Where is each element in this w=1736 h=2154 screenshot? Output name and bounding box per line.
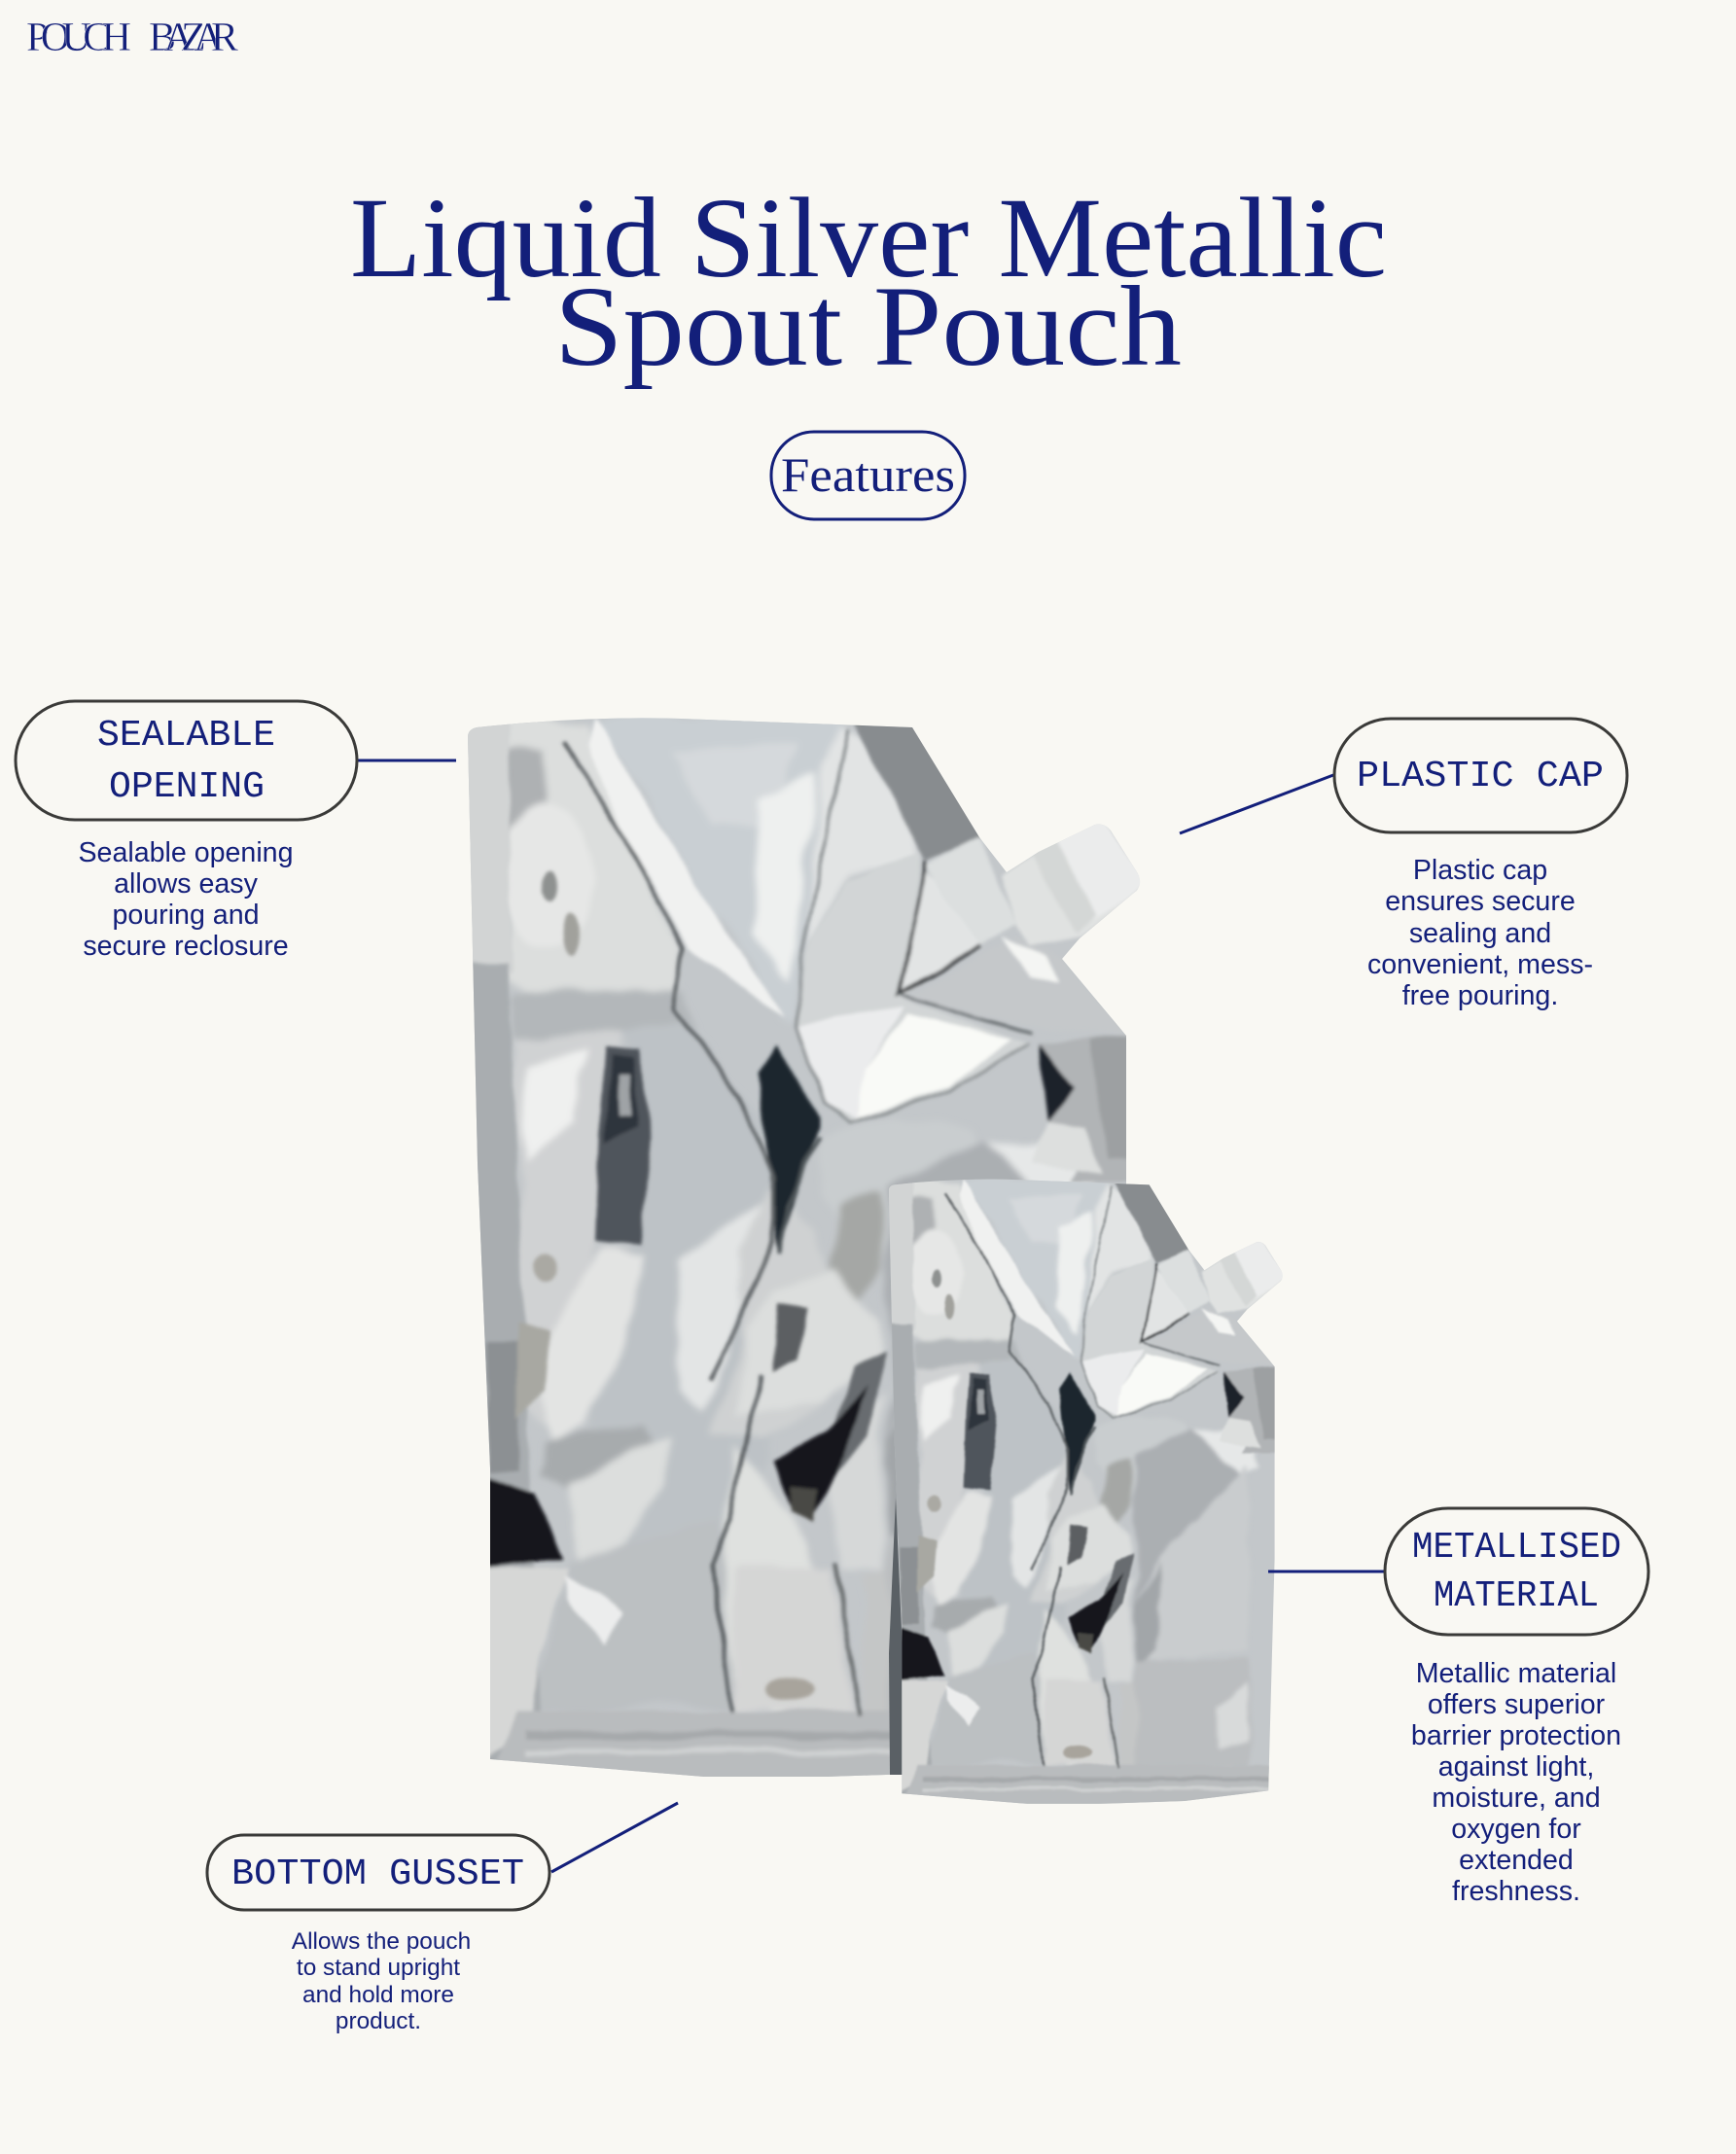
callout: metallised material: [1268, 1508, 1648, 1907]
callout: plastic cap: sealing and: [1409, 918, 1551, 949]
callout: sealable opening: allows easy: [114, 868, 259, 900]
callout: bottom gusset: to stand upright: [297, 1955, 460, 1981]
callout: bottom gusset: [207, 1803, 678, 2034]
callout: plastic cap: free pouring.: [1402, 980, 1558, 1011]
callout: bottom gusset: BOTTOM GUSSET: [231, 1854, 524, 1895]
logo: Pouch Bazar: POUCH: [26, 16, 131, 60]
callout: sealable opening: [16, 701, 456, 962]
title: [350, 174, 1387, 390]
callout: metallised material: freshness.: [1452, 1876, 1580, 1907]
callout: sealable opening: OPENING: [109, 766, 265, 808]
callout: bottom gusset: Allows the pouch: [292, 1928, 471, 1955]
small silver spout pouch: [882, 1175, 1287, 1812]
large silver spout pouch: [457, 710, 1148, 1789]
callout: sealable opening: secure reclosure: [83, 931, 289, 962]
features badge: [771, 432, 965, 519]
callout: metallised material: oxygen for: [1451, 1814, 1581, 1845]
callout: bottom gusset: product.: [336, 2008, 421, 2034]
shadow edge between the two pouches: [889, 1498, 906, 1775]
callout: bottom gusset: and hold more: [302, 1982, 454, 2008]
callout: sealable opening: Sealable opening: [78, 837, 294, 868]
callout: plastic cap: Plastic cap: [1413, 855, 1547, 886]
title: Spout Pouch: [554, 263, 1182, 390]
logo: Pouch Bazar: BAZAR: [149, 16, 238, 60]
features badge: Features: [781, 447, 955, 502]
callout: plastic cap: ensures secure: [1385, 886, 1576, 917]
callout: sealable opening: pouring and: [112, 900, 260, 931]
callout: metallised material: MATERIAL: [1434, 1575, 1599, 1617]
title: Liquid Silver Metallic: [350, 174, 1387, 301]
callout: metallised material: barrier protection: [1411, 1720, 1621, 1751]
callout: metallised material: extended: [1459, 1845, 1574, 1876]
callout: metallised material: Metallic material: [1416, 1658, 1616, 1689]
callout: metallised material: METALLISED: [1412, 1527, 1621, 1569]
callout: metallised material: offers superior: [1428, 1689, 1606, 1720]
callout: metallised material: moisture, and: [1432, 1783, 1601, 1814]
callout: plastic cap: [1180, 719, 1627, 1011]
callout: plastic cap: convenient, mess-: [1367, 949, 1593, 980]
callout: plastic cap: PLASTIC CAP: [1357, 756, 1604, 797]
callout: metallised material: against light,: [1438, 1751, 1594, 1783]
callout: sealable opening: SEALABLE: [97, 715, 275, 757]
logo: Pouch Bazar: [26, 16, 238, 60]
